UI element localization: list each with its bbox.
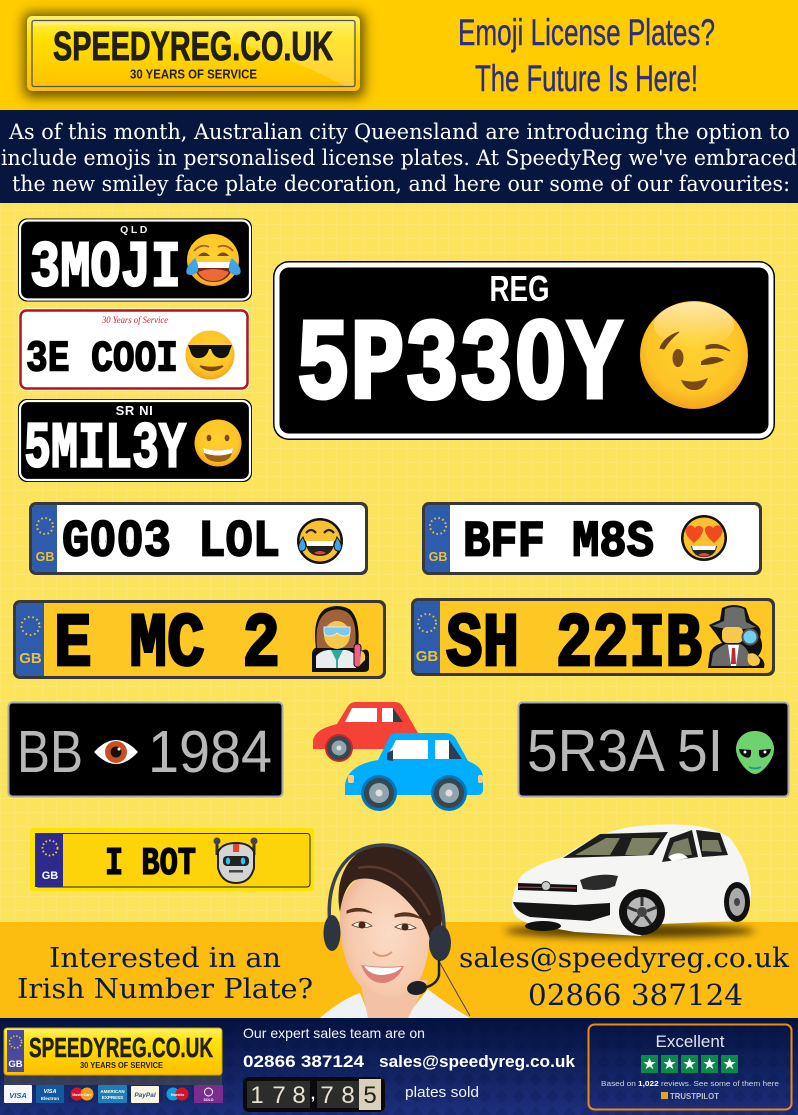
plate: 5MIL3Y: 5MIL3Y xyxy=(24,414,186,486)
sales team text: plates sold xyxy=(405,1085,479,1101)
icon: woman scientist emoji xyxy=(313,607,368,671)
plate: G003 LOL xyxy=(29,502,368,575)
plate: BFF M8S: GB xyxy=(429,550,447,564)
text: Irish plate prompt: Irish Number Plate? xyxy=(17,974,313,1005)
sales team text: 02866 387124 xyxy=(243,1053,365,1071)
icon: cartoon cars xyxy=(313,702,483,811)
plate: SH 22IB: GB xyxy=(416,648,438,665)
plate: 5MIL3Y: SR NI xyxy=(116,403,153,418)
text: Irish plate prompt: Interested in an xyxy=(49,943,281,974)
icon: winking emoji xyxy=(640,301,748,409)
plate: 5R3A 5I xyxy=(518,702,788,796)
plate: G003 LOL: GB xyxy=(36,550,54,564)
sales team text: sales@speedyreg.co.uk xyxy=(379,1053,576,1071)
icon: grinning emoji xyxy=(194,420,242,466)
plate: E MC 2: E MC 2 xyxy=(54,602,280,688)
footer logo plate: 30 YEARS OF SERVICE xyxy=(80,1061,164,1070)
payment card icons: VISA xyxy=(9,1091,27,1100)
icon: sunglasses emoji xyxy=(186,330,234,380)
text: contact details: sales@speedyreg.co.uk xyxy=(459,943,790,974)
red car xyxy=(313,702,418,762)
plates sold counter: 1 xyxy=(250,1082,264,1109)
plate: G003 LOL: G003 LOL xyxy=(62,512,280,572)
plate: I BOT xyxy=(30,828,314,891)
plate: 3E COOI: 3E COOI xyxy=(26,334,178,384)
title xyxy=(458,12,715,99)
plate: BB 1984 xyxy=(8,702,282,796)
plate: 3MOJI: 3MOJI xyxy=(30,232,181,306)
footer logo plate: GB xyxy=(8,1059,23,1070)
payment card icons xyxy=(4,1085,223,1103)
sales team text xyxy=(243,1025,576,1101)
plates sold counter xyxy=(243,1077,385,1112)
plates sold counter: 8 xyxy=(341,1082,355,1109)
plate: 3MOJI: QLD xyxy=(120,224,150,236)
payment card icons: MasterCard xyxy=(72,1093,92,1097)
plate: I BOT: GB xyxy=(42,870,58,882)
icon: laughing emoji xyxy=(297,518,343,564)
plate: I BOT: I BOT xyxy=(105,842,196,886)
plate: SH 22IB: SH 22IB xyxy=(446,602,702,688)
plate: E MC 2: GB xyxy=(19,650,42,667)
plate: 3MOJI xyxy=(18,218,252,306)
trustpilot rating box: Excellent xyxy=(656,1032,725,1051)
trustpilot rating box: TRUSTPILOT xyxy=(670,1091,720,1101)
blue car xyxy=(345,733,483,811)
footer logo plate xyxy=(4,1028,222,1085)
text: contact details: 02866 387124 xyxy=(528,978,743,1012)
intro text band xyxy=(0,110,798,203)
sales team text: Our expert sales team are on xyxy=(243,1025,425,1041)
plate: 5P330Y: REG xyxy=(490,268,550,309)
payment card icons: VISA xyxy=(44,1089,56,1095)
plates sold counter: 5 xyxy=(363,1082,377,1109)
payment card icons: Electron xyxy=(41,1096,59,1101)
logo plate xyxy=(24,13,364,97)
photo: white hatchback car xyxy=(505,824,755,938)
plate: 3E COOI xyxy=(18,308,250,390)
plate: BB 1984: 1984 xyxy=(148,719,272,785)
header band xyxy=(0,0,798,110)
footer logo plate: SPEEDYREG.CO.UK xyxy=(29,1032,213,1063)
plate: 5R3A 5I: 5R3A 5I xyxy=(527,718,723,784)
icon: robot emoji xyxy=(214,838,258,883)
plate: BFF M8S xyxy=(422,502,762,575)
payment card icons: PayPal xyxy=(134,1092,156,1099)
plate: BB 1984: BB xyxy=(17,719,83,785)
icon: alien emoji xyxy=(736,731,774,774)
title: The Future Is Here! xyxy=(475,58,698,99)
contact band xyxy=(0,922,798,1019)
payment card icons: Maestro xyxy=(171,1093,184,1097)
payment card icons: EXPRESS xyxy=(102,1095,123,1100)
intro text band: As of this month, Australian city Queensland are introducing the option to xyxy=(8,120,790,145)
text: Irish plate prompt xyxy=(17,943,313,1005)
logo plate: SPEEDYREG.CO.UK xyxy=(53,23,333,69)
plate: 3E COOI: 30 Years of Service xyxy=(101,315,168,326)
five green stars xyxy=(641,1055,738,1073)
text: contact details xyxy=(459,943,790,1012)
icon: laughing tears emoji xyxy=(186,234,241,286)
payment card icons: AMERICAN xyxy=(100,1089,125,1094)
plates sold counter: 7 xyxy=(272,1082,286,1109)
plate: 5P330Y xyxy=(273,261,775,440)
icon: heart eyes emoji xyxy=(681,515,727,561)
plate: 5P330Y: 5P330Y xyxy=(296,302,622,432)
photo: call centre agent with headset xyxy=(320,845,470,1018)
trustpilot rating box xyxy=(588,1024,792,1110)
payment card icons: SOLO xyxy=(204,1098,214,1102)
icon: eye emoji xyxy=(94,740,138,764)
footer band xyxy=(0,1018,798,1115)
logo plate: 30 YEARS OF SERVICE xyxy=(130,66,257,82)
plate: BFF M8S: BFF M8S xyxy=(463,514,654,572)
plates sold counter: 8 xyxy=(292,1082,306,1109)
plates sold counter: 7 xyxy=(320,1082,334,1109)
trustpilot rating box: Based on 1,022 reviews. See some of them here xyxy=(601,1079,779,1088)
plates sold counter: , xyxy=(311,1086,315,1103)
icon: detective emoji xyxy=(708,605,764,668)
